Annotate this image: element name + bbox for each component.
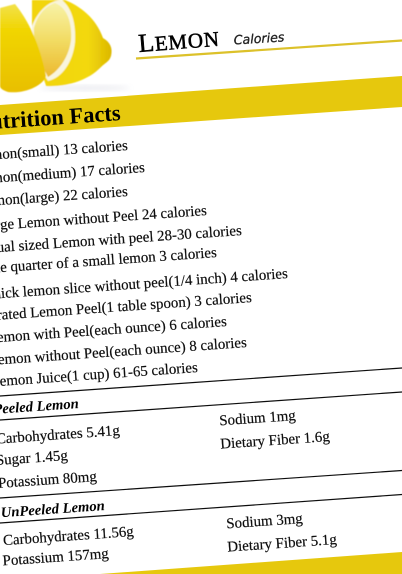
- nutrients: peeled lemon, right column: [219, 408, 331, 453]
- nutrients: unpeeled lemon, left column: [2, 524, 135, 569]
- icon: lemon photo: [0, 0, 130, 92]
- nutrients: unpeeled lemon, right column: Dietary Fiber 5.1g: [227, 532, 338, 556]
- title: [137, 23, 285, 58]
- nutrients: peeled lemon, right column: Sodium 1mg: [219, 408, 297, 429]
- heading: UnPeeled Lemon: UnPeeled Lemon: [0, 498, 105, 521]
- text block: calorie list: [0, 138, 288, 391]
- nutrients: peeled lemon, right column: Dietary Fiber 1.6g: [220, 429, 331, 453]
- title underline: [136, 40, 402, 58]
- nutrients: peeled lemon, left column: Potassium 80mg: [0, 469, 98, 492]
- nutrients: unpeeled lemon, right column: Sodium 3mg: [226, 511, 304, 532]
- nutrients: unpeeled lemon, left column: Potassium 157mg: [2, 546, 110, 569]
- nutrients: peeled lemon, left column: [0, 423, 121, 492]
- divider lines: [0, 368, 402, 523]
- nutrients: unpeeled lemon, right column: [226, 511, 338, 556]
- title: LEMON: [137, 23, 221, 58]
- heading band: Nutrition Facts: [0, 76, 402, 135]
- title: Calories: [233, 29, 285, 47]
- footer band: [100, 552, 402, 574]
- nutrients: unpeeled lemon, left column: Carbohydrates 11.56g: [3, 524, 135, 549]
